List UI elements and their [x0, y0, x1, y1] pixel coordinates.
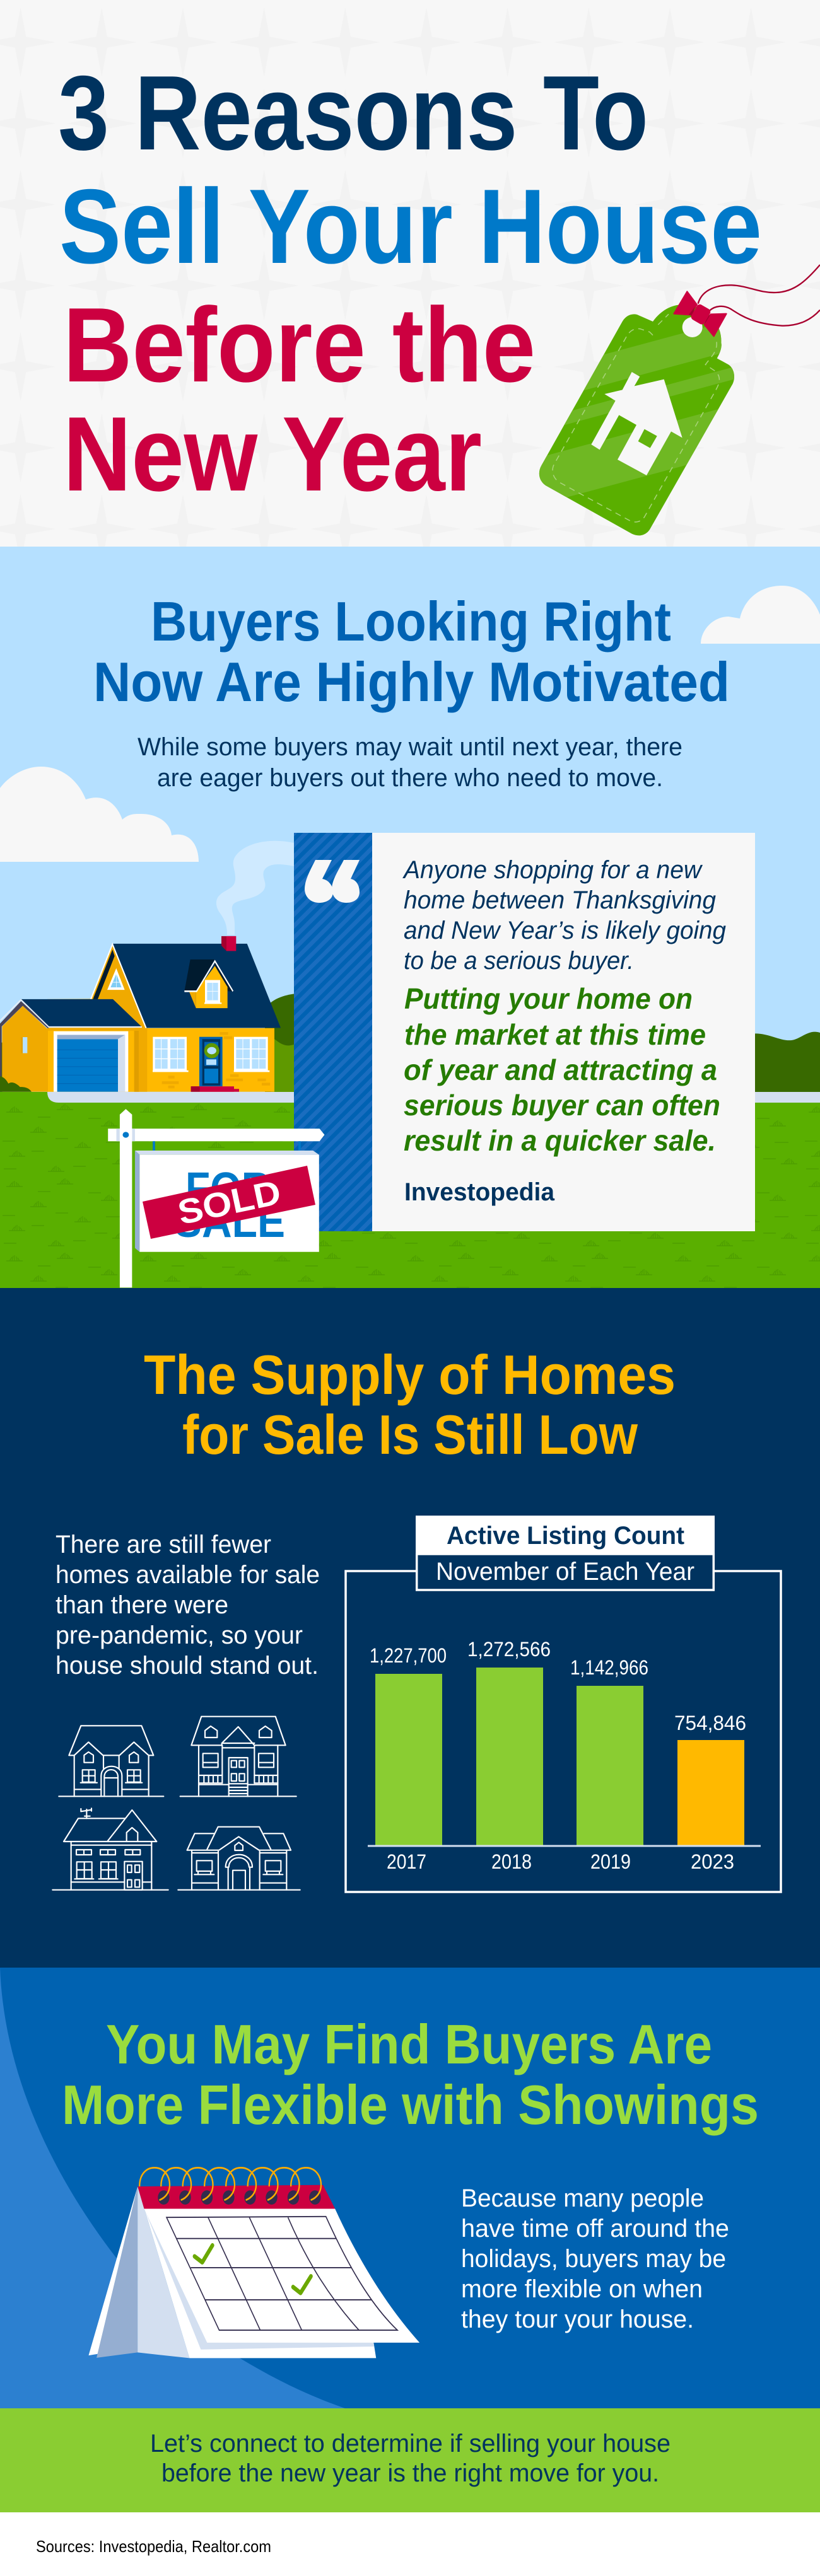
icon: cloud right [701, 586, 820, 644]
title: New Year [63, 395, 482, 513]
chart frame [346, 1571, 781, 1892]
bar: 2018 [467, 1638, 551, 1873]
quote attribution: Investopedia [404, 1178, 555, 1206]
text block: supply body: There are still fewer [56, 1531, 271, 1558]
bar: 2018: 1,272,566 [467, 1638, 551, 1661]
background: blue flexible section [0, 1968, 820, 2408]
text block: flexible body: more flexible on when [461, 2275, 703, 2303]
quote text: Anyone shopping for a new [402, 856, 703, 884]
illustration: for sale sign with sold banner: FOR [185, 1164, 271, 1214]
icon: cloud left [0, 767, 199, 862]
text block: buyers intro: While some buyers may wait until next year, there [138, 733, 682, 761]
background: footer [0, 2512, 820, 2576]
hills right [751, 1032, 820, 1092]
section heading: supply: The Supply of Homes [144, 1343, 676, 1406]
section heading: buyers: Now Are Highly Motivated [93, 651, 730, 713]
icon: house three [52, 1808, 168, 1890]
icon: house two [180, 1717, 296, 1796]
quote emphasis: of year and attracting a [404, 1053, 717, 1086]
illustration: yellow house [0, 936, 281, 1092]
chart axis [368, 1845, 761, 1847]
title: Before the [63, 286, 536, 404]
bar: 2019: 1,142,966 [570, 1656, 648, 1679]
section heading: supply: for Sale Is Still Low [182, 1403, 638, 1466]
icon: quotation mark [305, 860, 360, 903]
text block: flexible body [461, 2184, 729, 2333]
section heading: buyers: Buyers Looking Right [151, 590, 671, 653]
icon: house four [178, 1827, 300, 1890]
quote emphasis: the market at this time [404, 1018, 706, 1051]
quote body background [372, 833, 755, 1231]
title: 3 Reasons To [58, 54, 648, 172]
icon: house one [59, 1726, 163, 1796]
chart title [416, 1516, 715, 1554]
quote text [402, 856, 726, 975]
bar: 2017 [370, 1644, 447, 1873]
illustration: for sale sign with sold banner: SALE [174, 1197, 285, 1247]
bar: 2017: 1,227,700 [370, 1644, 447, 1667]
chart title: Active Listing Count [447, 1522, 684, 1550]
icons: four outlined houses [52, 1717, 300, 1890]
section heading: flexible: More Flexible with Showings [62, 2074, 759, 2136]
text block: buyers intro [138, 733, 682, 792]
icon: chimney smoke [216, 841, 294, 935]
text block: supply body: homes available for sale [56, 1561, 320, 1589]
text block: flexible body: holidays, buyers may be [461, 2245, 726, 2273]
text block: flexible body: have time off around the [461, 2215, 729, 2242]
bar: 2023: 754,846 [674, 1712, 746, 1734]
bar: 2017: 2017 [387, 1850, 426, 1873]
background: sky [0, 547, 820, 1093]
panel: quote [294, 833, 755, 1231]
section heading: flexible [62, 2013, 759, 2136]
text block: supply body [56, 1531, 320, 1680]
sources footer: Sources: Investopedia, Realtor.com [36, 2537, 271, 2556]
quote emphasis: serious buyer can often [404, 1089, 720, 1122]
text block: supply body: pre-pandemic, so your [56, 1622, 303, 1649]
bar: 2023 [674, 1712, 746, 1873]
quote emphasis: Putting your home on [404, 982, 693, 1015]
bar: 2019: 2019 [590, 1850, 631, 1873]
section heading: supply [144, 1343, 676, 1466]
section heading: buyers [93, 590, 730, 713]
bar: 2023: 2023 [691, 1850, 734, 1873]
text block: supply body: house should stand out. [56, 1652, 319, 1680]
chart subtitle: November of Each Year [436, 1558, 694, 1586]
bar: 2018: 2018 [491, 1850, 532, 1873]
illustration: for sale sign with sold banner [108, 1109, 325, 1287]
chart: active listing count [346, 1516, 781, 1892]
text block: supply body: than there were [56, 1591, 228, 1619]
text block: flexible body: Because many people [461, 2184, 704, 2212]
panel: call to action: before the new year is the right move for you. [161, 2459, 659, 2487]
chart subtitle [417, 1554, 713, 1590]
bar: 2019 [570, 1656, 648, 1873]
panel: call to action: Let’s connect to determine if selling your house [150, 2430, 671, 2457]
ground: grass lawn [0, 1092, 820, 1288]
text block: flexible body: they tour your house. [461, 2306, 694, 2333]
section heading: flexible: You May Find Buyers Are [106, 2013, 712, 2075]
quote emphasis [404, 982, 720, 1157]
illustration: calendar with check marks [88, 2167, 419, 2358]
hills left [265, 994, 296, 1092]
icon: green house price tag with red bow [530, 265, 820, 535]
quote column with stripes [294, 833, 372, 1231]
background: navy supply section [0, 1288, 820, 1968]
quote emphasis: result in a quicker sale. [404, 1124, 716, 1157]
title [58, 54, 762, 513]
quote text: home between Thanksgiving [404, 886, 716, 914]
text block: buyers intro: are eager buyers out there who need to move. [157, 764, 663, 792]
quote text: to be a serious buyer. [404, 947, 634, 975]
quote text: and New Year’s is likely going [404, 917, 726, 944]
sidewalk [47, 1092, 820, 1103]
illustration: for sale sign with sold banner: SOLD [174, 1172, 284, 1232]
background: title section [0, 0, 820, 547]
panel: call to action [0, 2408, 820, 2512]
